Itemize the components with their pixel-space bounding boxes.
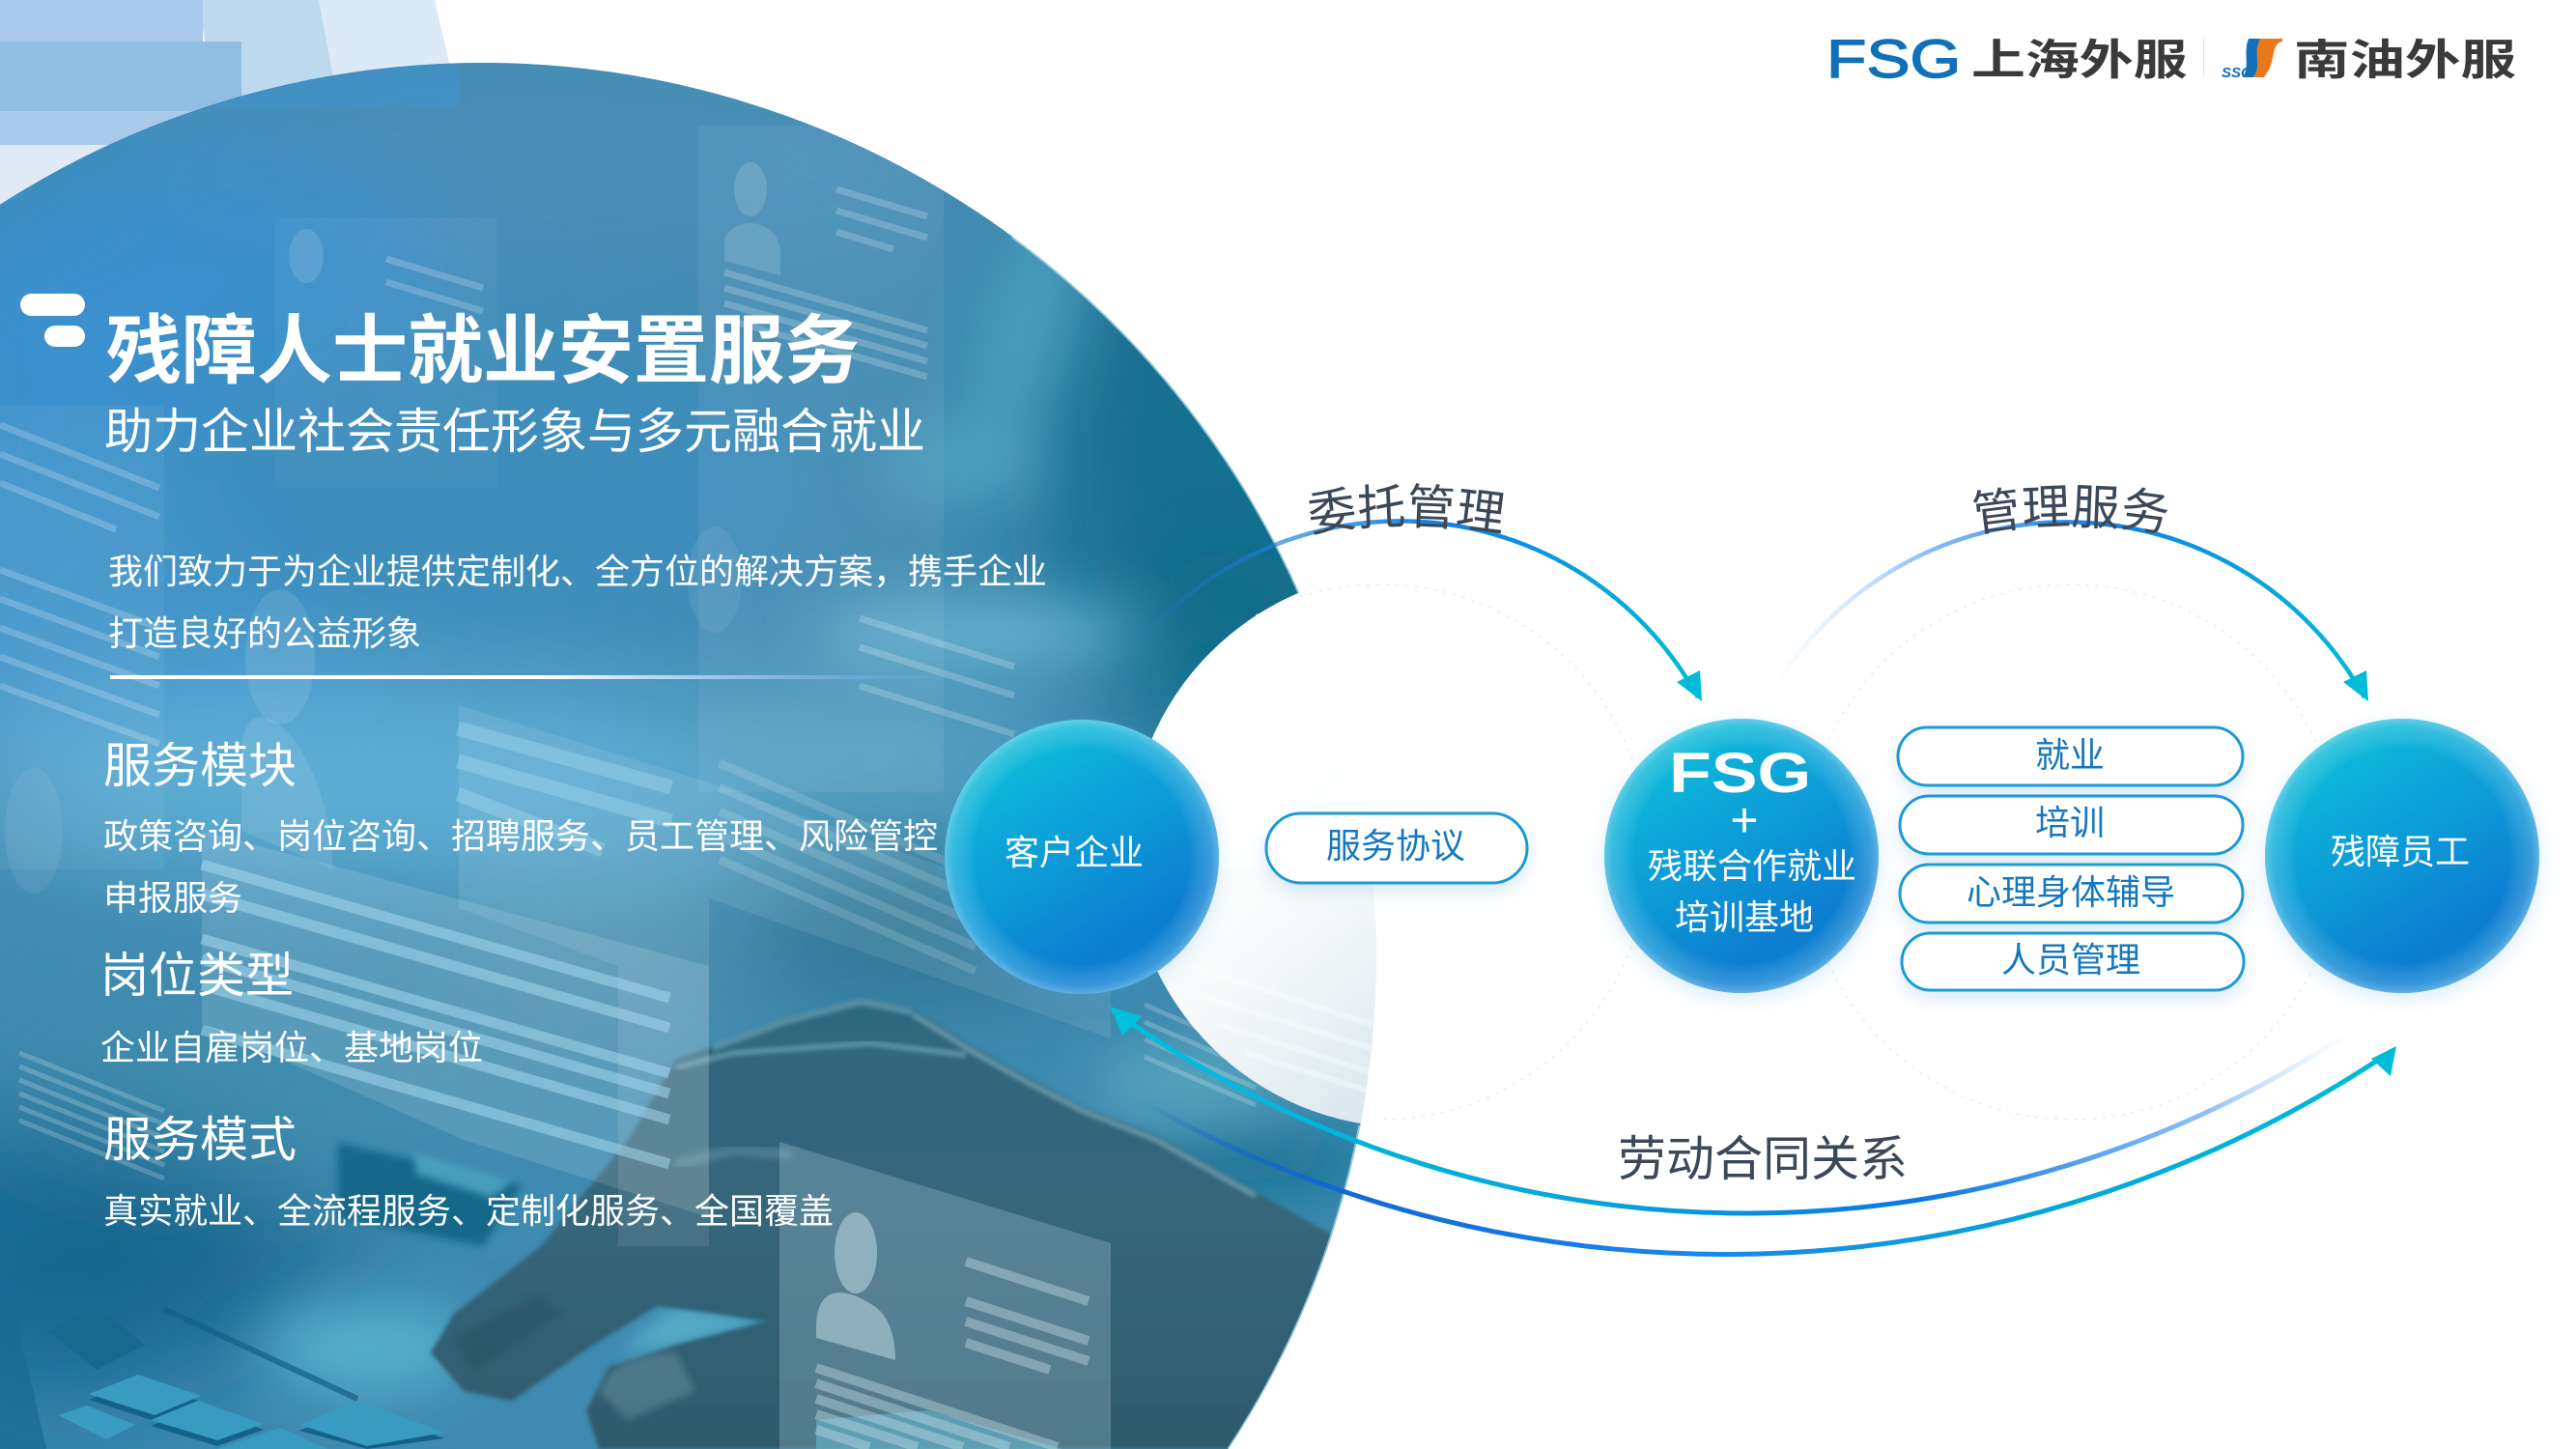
node: 残障员工: 残障员工	[2331, 832, 2470, 871]
white cutout circle with frosted lower area	[1111, 565, 1685, 1135]
heading marker	[20, 294, 85, 347]
logo: 南油外服: 南油外服	[2294, 36, 2516, 83]
intro text	[108, 552, 1047, 653]
section: 服务模块	[103, 739, 938, 918]
arc arrow: 委托管理	[1128, 521, 1702, 701]
node: 客户企业	[945, 720, 1219, 994]
document stripes	[0, 189, 1014, 744]
arc arrow: 管理服务	[1773, 522, 2368, 701]
pill: 心理身体辅导: 心理身体辅导	[1967, 872, 2175, 912]
divider rule	[110, 675, 966, 679]
logo: FSG 上海外服	[1826, 29, 2187, 90]
node: FSG + 残联合作就业培训基地: FSG	[1669, 741, 1811, 804]
pill: 心理身体辅导	[1900, 865, 2243, 923]
logo: FSG 上海外服: FSG	[1826, 29, 1961, 90]
title: 残障人士就业安置服务	[106, 308, 860, 393]
section: 服务模块: 政策咨询、岗位咨询、招聘服务、员工管理、风险管控	[103, 816, 938, 856]
pill: 服务协议: 服务协议	[1326, 826, 1465, 866]
pill: 就业	[1898, 727, 2243, 785]
section: 服务模块: 服务模块	[103, 739, 297, 793]
node: FSG + 残联合作就业培训基地	[1604, 719, 1879, 993]
section: 服务模块: 申报服务	[103, 878, 242, 918]
section: 服务模式	[103, 1113, 834, 1231]
section: 岗位类型: 企业自雇岗位、基地岗位	[100, 1028, 483, 1067]
section: 服务模式: 服务模式	[103, 1113, 297, 1167]
logo divider	[2203, 39, 2204, 77]
logo: 南油外服: SSO	[2222, 65, 2252, 81]
node: FSG + 残联合作就业培训基地: 残联合作就业	[1648, 846, 1856, 886]
pill: 就业: 就业	[2035, 735, 2105, 775]
photo circle: hand on keyboard with overlaid resume documents	[0, 63, 1361, 1449]
logo: FSG 上海外服: 上海外服	[1971, 36, 2187, 84]
section: 服务模式: 真实就业、全流程服务、定制化服务、全国覆盖	[103, 1191, 834, 1231]
pill: 人员管理	[1902, 933, 2244, 990]
intro text: 打造良好的公益形象	[108, 613, 421, 653]
hand silhouette	[429, 997, 1333, 1449]
arc arrow: labor contract to client	[1110, 1007, 2357, 1213]
pill: 培训	[1900, 796, 2243, 854]
section: 岗位类型: 岗位类型	[100, 949, 294, 1003]
pill: 人员管理: 人员管理	[2001, 940, 2140, 980]
label: 委托管理: 委托管理	[1309, 483, 1503, 535]
keyboard keys	[0, 1246, 444, 1449]
section: 岗位类型	[100, 949, 483, 1067]
node: FSG + 残联合作就业培训基地: +	[1730, 793, 1759, 847]
faint dotted orbit circles	[1114, 584, 2339, 1120]
pill: 培训: 培训	[2035, 803, 2105, 842]
node: 客户企业: 客户企业	[1005, 833, 1144, 872]
rim of photo circle	[1012, 237, 1360, 1449]
dark gap and bright trackpad behind fingers	[338, 1143, 773, 1352]
translucent band	[203, 63, 459, 108]
top-left decorative layered panels	[0, 0, 464, 217]
subtitle: 助力企业社会责任形象与多元融合就业	[104, 405, 925, 459]
pill: 服务协议	[1266, 813, 1527, 883]
intro text: 我们致力于为企业提供定制化、全方位的解决方案，携手企业	[108, 552, 1047, 591]
label: 管理服务: 管理服务	[1972, 485, 2167, 534]
overlaid translucent resume panels	[0, 126, 1111, 1246]
node: FSG + 残联合作就业培训基地: 培训基地	[1675, 897, 1814, 937]
lower resume card	[779, 1142, 1111, 1449]
node: 残障员工	[2265, 719, 2539, 993]
label: 劳动合同关系: 劳动合同关系	[1618, 1132, 1908, 1186]
arc arrow: labor contract to employee	[1140, 1046, 2396, 1254]
